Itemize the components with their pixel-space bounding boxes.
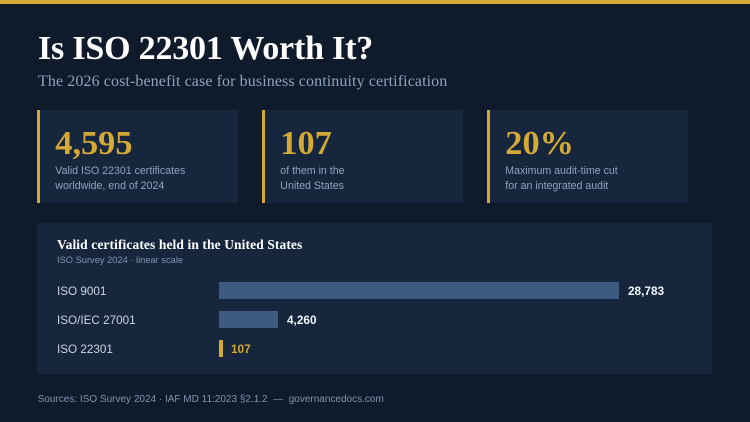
stat description: Maximum audit-time cut bbox=[505, 164, 618, 176]
bar: ISO 22301 bbox=[219, 340, 223, 357]
stat description: worldwide, end of 2024 bbox=[55, 180, 164, 192]
row label: ISO 9001: ISO 9001 bbox=[57, 285, 106, 298]
row label: ISO/IEC 27001: ISO/IEC 27001 bbox=[57, 314, 136, 327]
stat description: of them in the bbox=[280, 164, 344, 176]
subtitle: The 2026 cost-benefit case for business continuity certification bbox=[38, 72, 447, 90]
chart heading: Valid certificates held in the United States bbox=[57, 237, 302, 252]
value: ISO 22301: 107 bbox=[231, 342, 251, 356]
value: ISO/IEC 27001: 4,260 bbox=[287, 313, 317, 327]
row label: ISO 22301: ISO 22301 bbox=[57, 343, 113, 356]
stat description bbox=[55, 164, 185, 192]
stat description: United States bbox=[280, 180, 344, 192]
stat description: for an integrated audit bbox=[505, 180, 608, 192]
title: Is ISO 22301 Worth It? bbox=[38, 30, 373, 67]
stat description bbox=[505, 164, 618, 192]
chart subheading: ISO Survey 2024 · linear scale bbox=[57, 255, 183, 265]
stat description: Valid ISO 22301 certificates bbox=[55, 164, 185, 176]
panel: stat audit time bbox=[487, 110, 688, 202]
panel: stat worldwide certificates bbox=[37, 110, 238, 202]
value: ISO 9001: 28,783 bbox=[628, 284, 664, 298]
panel: bar chart bbox=[37, 223, 712, 374]
stat number: 107 bbox=[280, 124, 332, 162]
stat number: 20% bbox=[505, 124, 574, 162]
stat number: 4,595 bbox=[55, 124, 132, 162]
top accent bar bbox=[0, 0, 750, 4]
bar: ISO 9001 bbox=[219, 282, 619, 299]
bar: ISO/IEC 27001 bbox=[219, 311, 278, 328]
stat description bbox=[280, 164, 344, 192]
footer sources: Sources: ISO Survey 2024 · IAF MD 11:2023 §2.1.2 — governancedocs.com bbox=[38, 394, 384, 404]
panel: stat United States bbox=[262, 110, 463, 202]
